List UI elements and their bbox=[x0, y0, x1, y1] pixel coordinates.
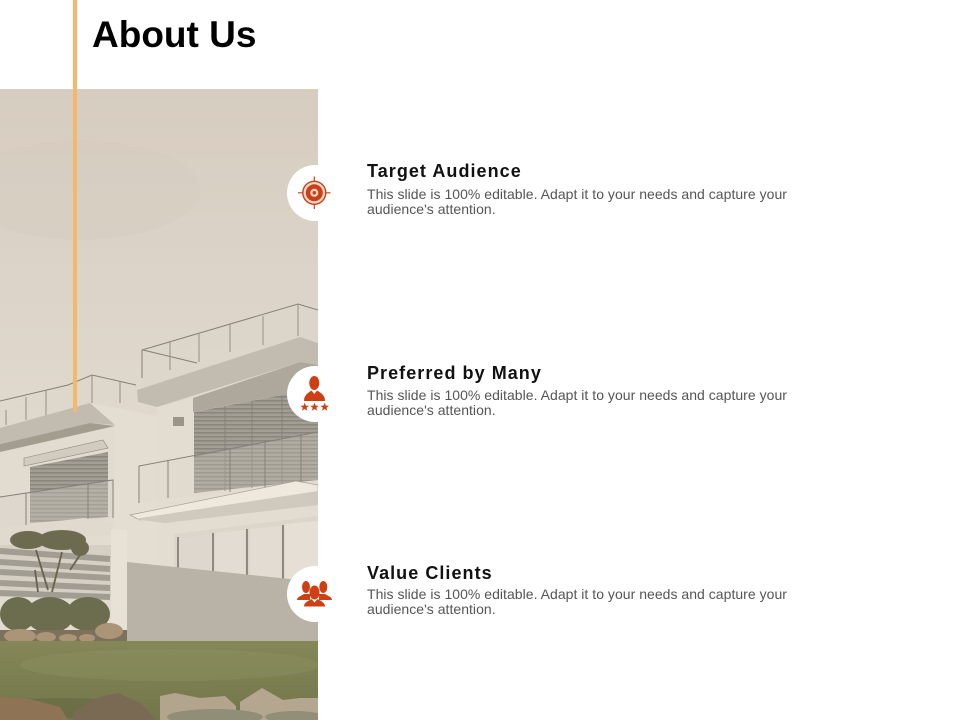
text block: target audience: audience's attention. bbox=[367, 201, 496, 217]
lawn bbox=[0, 641, 318, 720]
left building bbox=[0, 417, 163, 650]
icon: group of people bbox=[287, 566, 332, 622]
icon: target bbox=[287, 165, 330, 221]
right building bbox=[157, 365, 318, 650]
text block: preferred by many bbox=[367, 363, 787, 418]
orange vertical line bbox=[73, 0, 77, 412]
photo: modern white house bbox=[0, 89, 318, 720]
title: About Us bbox=[92, 14, 256, 55]
text block: value clients bbox=[367, 563, 787, 617]
foreground rocks bbox=[0, 697, 68, 720]
text block: value clients: This slide is 100% editable. Adapt it to your needs and capture your bbox=[367, 586, 787, 602]
stones at the bed bbox=[0, 630, 127, 643]
text block: target audience bbox=[367, 161, 787, 217]
text block: preferred by many: Preferred by Many bbox=[367, 363, 542, 383]
text block: target audience: Target Audience bbox=[367, 161, 522, 181]
text block: preferred by many: audience's attention. bbox=[367, 402, 496, 418]
text block: preferred by many: This slide is 100% editable. Adapt it to your needs and capture your bbox=[367, 387, 787, 403]
text block: value clients: audience's attention. bbox=[367, 601, 496, 617]
garden wall bbox=[127, 562, 318, 642]
icon: person with three stars bbox=[287, 366, 329, 422]
text block: value clients: Value Clients bbox=[367, 563, 493, 583]
fence and hedge bbox=[0, 545, 111, 597]
text block: target audience: This slide is 100% editable. Adapt it to your needs and capture your bbox=[367, 186, 787, 202]
